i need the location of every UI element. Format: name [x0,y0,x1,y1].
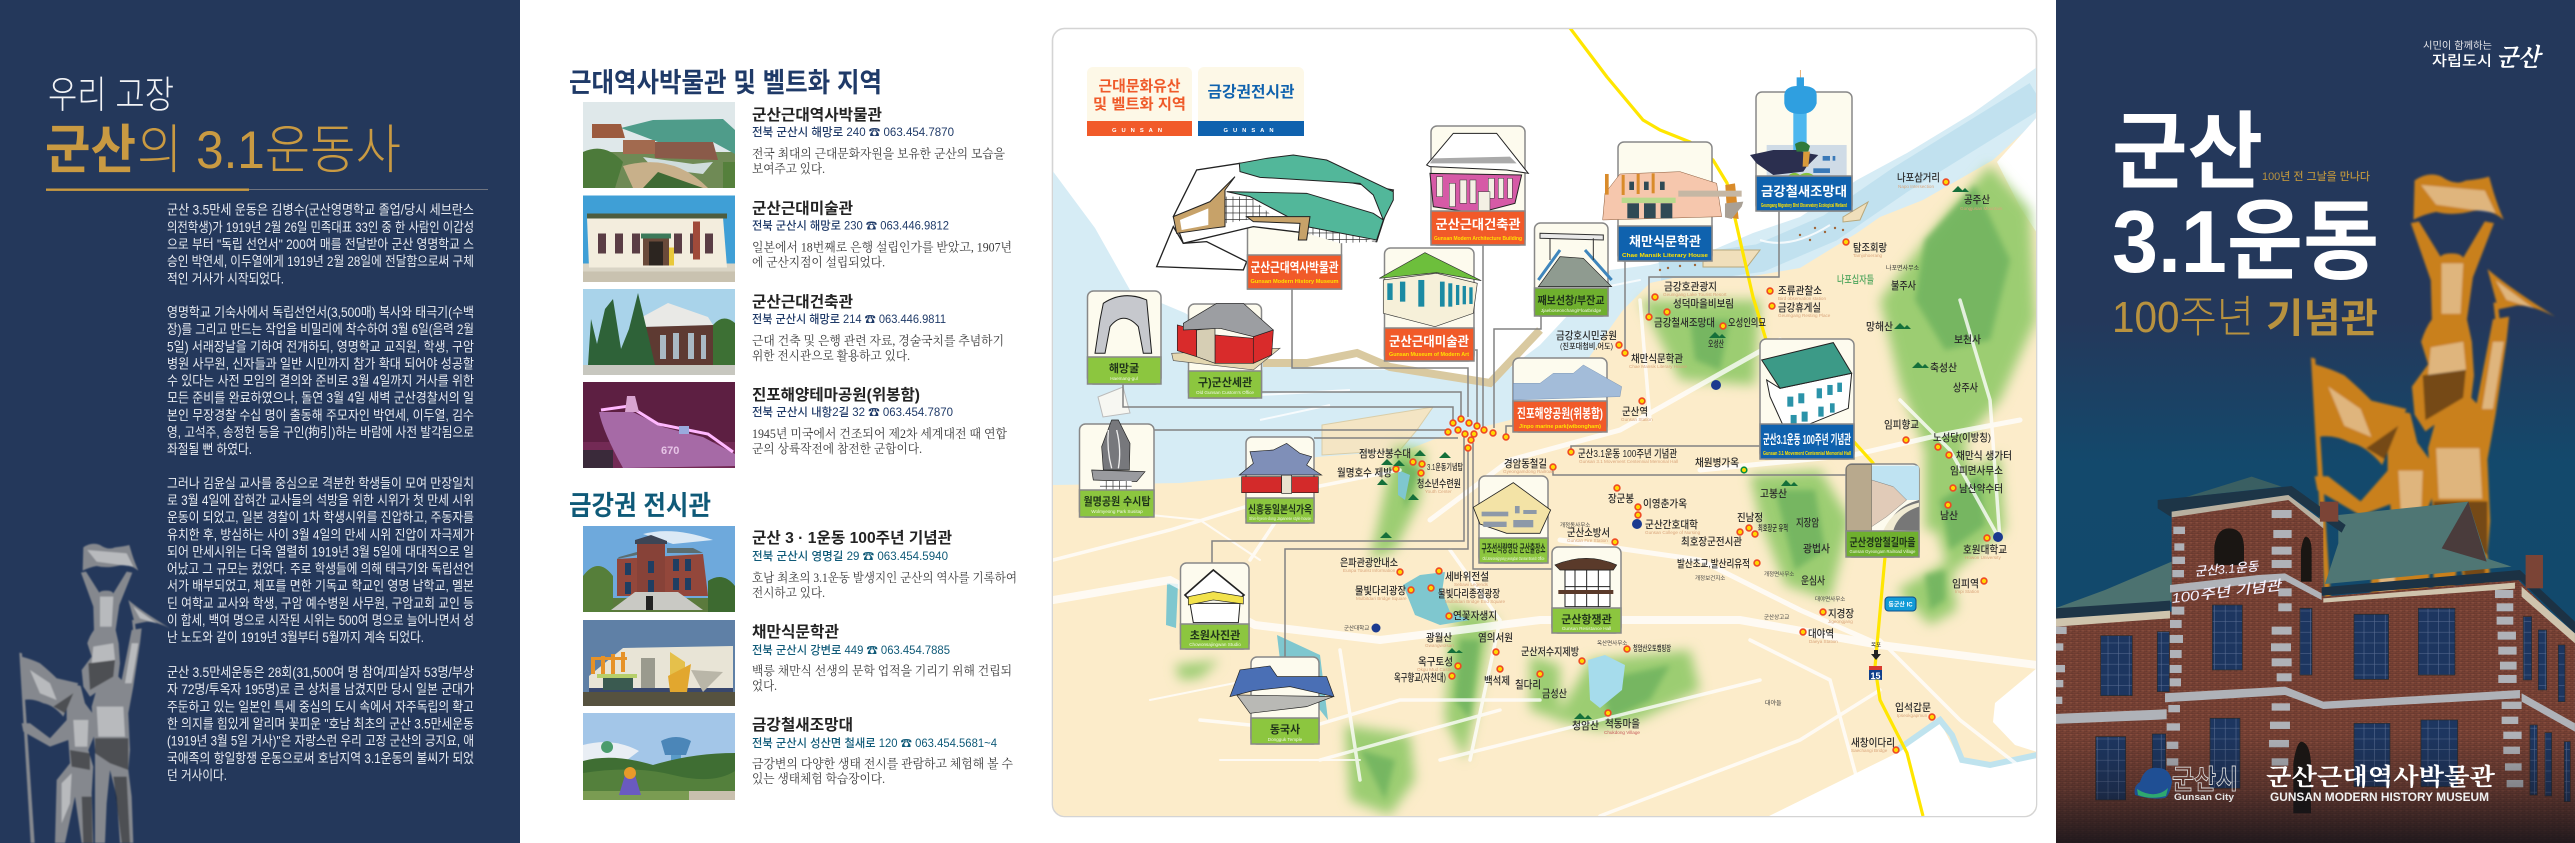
map labels: 상주사 [1953,381,1978,394]
legend: modern heritage [1087,67,1192,136]
map labels: 물빛다리광장 [1355,585,1406,597]
card: Sinheung-dong Japanese house: 신흥동일본식가옥 [1248,502,1312,516]
text: migratory bird observatory: 전북 군산시 성산면 철새로 120 ☎ 063.454.5681~4 [752,737,998,750]
sign: East Gunsan IC: 동군산 IC [1888,600,1913,608]
text: art museum: 일본에서 18번째로 은행 설립인가를 받았고, 1907년 [752,240,1012,254]
legend: modern heritage: 및 벨트화 지역 [1093,96,1186,113]
map labels: (진포대첩비,어도) [1560,341,1613,351]
card: Chowon photo studio: Chowonsajingwan Studio [1189,642,1241,647]
map labels: Bird observation station [1778,296,1826,301]
map labels: 진남정 [1737,512,1763,524]
map labels: Gunsan College of Nursing [1645,530,1701,535]
text block: paragraph 4: 군산 3.5만세운동은 28회(31,500여 명 참여/피살자 53명/부상 [167,665,474,680]
photo: history museum [583,102,735,188]
text: centennial memorial hall: 호남 최초의 3.1운동 발생지인 군산의 역사를 기록하여 [752,570,1017,585]
legend: modern heritage: 근대문화유산 [1098,78,1181,95]
map labels: 새창이다리 [1851,737,1895,749]
slogan: Gunsan self-reliant city [2424,40,2543,68]
subtitle: 100th anniversary memorial [2115,296,2377,336]
expressway 15 [1570,28,1923,816]
text block: paragraph 1: 승인 박연세, 이두열에게 1919년 2월 28일에 전달함으로써 구체 [167,254,474,269]
map labels: Napo Intersection [1898,184,1934,189]
card: Chae Mansik literary house [1603,142,1743,261]
text block: paragraph 1: 으로 부터 "독립 선언서" 200여 매를 전달받아 군산 영명학교 스 [167,237,474,252]
card: former food corporation: Old Joseonsigryang-yeongdan Gunsan Branch Office [1482,556,1545,561]
text: migratory bird observatory: 금강철새조망대 [752,716,853,734]
text block: paragraph 3: 유치한 후, 방심하는 사이 3월 4일의 만세 시위 진압이 자극제가 [167,527,474,542]
text: history museum: 전국 최대의 근대문화자원을 보유한 군산의 모습을 [752,146,1005,161]
map labels: 염의서원 [1478,631,1513,644]
legend: Geumgang exhibition: GUNSAN [1223,128,1279,134]
card: former food corporation [1473,476,1551,563]
card: Dongguk temple: Dongguk Temple [1268,737,1303,742]
card: bird observatory: 금강철새조망대 [1761,184,1847,199]
text: history museum [752,106,1005,176]
card: Chowon photo studio: 초원사진관 [1190,628,1240,642]
map labels: Youth Center [1425,489,1452,494]
text block: paragraph 2: 영명학교 기숙사에서 독립선언서(3,500매) 복사와 태극기(수백 [167,305,474,320]
map labels: 임피면사무소 [1950,465,2003,477]
text block: paragraph 4: 한 의지를 힘있게 알리며 꽃피운 "호남 최초의 군산 3.5만세운동 [167,716,474,732]
photo: centennial memorial hall [583,526,735,612]
map labels: Tamjohoerang [1853,253,1883,258]
text block: paragraph 4: 자 72명/투옥자 195명)로 큰 상처를 남겼지만 당시 일본 군대가 [167,682,474,697]
heading: Geumgang area exhibition halls: 금강권 전시관 [569,491,711,521]
map labels: Gunsan 3.1 Movement Centennial Memorial Hall [1579,459,1678,464]
map labels: Jigeongjang [1828,619,1853,624]
logo: Gunsan city [2135,765,2238,803]
map labels: Saechangi Bridge [1851,748,1888,753]
text block: paragraph 2: 영, 고석주, 송정헌 등을 구인(拘引)하는 바람에 사전 발각됨으로 [167,425,474,440]
map labels: 나포삼거리 [1897,171,1940,184]
map labels: 조류관찰소 [1778,285,1822,297]
map labels: 대야들 [1765,699,1782,707]
card: Sinheung-dong Japanese house: Shin-hyeon-dong Japanese style house [1249,516,1311,521]
map labels: Impi Station [1955,589,1980,594]
text block: paragraph 2: 장)를 그리고 만드는 작업을 비밀리에 착수하여 3월 6일(음력 2월 [167,322,474,337]
text block: paragraph 3: 딘 여학교 교사와 학생, 구암 예수병원 사무원, 구암교회 교인 등 [167,596,474,611]
map labels: 물빛다리종점광장 [1438,587,1500,600]
text: migratory bird observatory: 금강변의 다양한 생태 전시를 관람하고 체험해 볼 수 [752,756,1013,771]
map labels: 칠다리 [1515,678,1541,691]
card: Sinheung-dong Japanese house [1239,437,1322,523]
map labels: 옥구향교(자천대) [1394,671,1446,684]
card: Gyeongam railroad village: Gunsan Gyeongam Railroad Village [1850,549,1916,554]
text: architecture hall: 전북 군산시 해망로 214 ☎ 063.446.9811 [752,313,946,326]
map labels: 임피역 [1952,577,1979,590]
logo: Gunsan modern history museum: GUNSAN MODERN HISTORY MUSEUM [2270,792,2489,804]
map labels: 공주산 [1964,194,1990,206]
map labels: 옥구토성 [1418,656,1453,668]
map labels: Sebawi Legends [1454,582,1489,587]
heading: Gunsan 3.1 movement history: 군산 [45,121,136,180]
legend: Geumgang exhibition [1198,67,1304,136]
text: art museum: 군산근대미술관 [752,200,853,218]
title rule [46,188,488,191]
heading: our hometown: 우리 고장 [48,75,174,117]
text: Chae Mansik literary house: 었다. [752,678,777,693]
photo: Chae Mansik literary house [583,620,735,706]
text block: paragraph 1: 군산 3.5만세 운동은 김병수(군산영명학교 졸업/당시 세브란스 [167,203,474,218]
text: Chae Mansik literary house [752,623,1012,693]
map labels: 최호장군전시관 [1681,535,1742,548]
text block: paragraph 1: 적인 거사가 시작되었다. [167,271,284,286]
text block: paragraph 3 [167,476,474,645]
map markers: location dots [1393,179,1990,753]
text: architecture hall: 군산근대건축관 [752,293,853,311]
photo: Jinpo park warship: 670 [661,445,679,457]
text block: paragraph 3: 그러나 김윤실 교사를 중심으로 격분한 학생들이 모여 만장일치 [167,476,474,491]
card: old customs office: 구)군산세관 [1198,375,1252,389]
map labels: 옥산면사무소 [1597,639,1627,647]
map labels: 보천사 [1954,333,1981,346]
card: Chowon photo studio [1180,563,1249,649]
text: art museum: 에 군산지점이 설립되었다. [752,254,885,270]
text: history museum: 군산근대역사박물관 [752,106,882,124]
card: modern architecture hall: 군산근대건축관 [1436,217,1521,232]
text block: paragraph 4: 주둔하고 있는 일본인 특세 중심의 도시 속에서 자주독립의 확고 [167,699,474,714]
text block: paragraph 2: 수 있다는 사전 모임의 결의와 준비로 3월 4일까지 거사를 위한 [167,374,474,389]
map base: geography [1052,28,2037,817]
map labels: 나포면사무소 [1886,264,1920,272]
map labels: 금강휴게실 [1778,301,1821,314]
icon: highway 15 shield [1869,666,1882,681]
text block: paragraph 2: 좌절될 뻔 하였다. [167,442,252,457]
map labels: 청암산오토캠핑장 [1633,643,1671,653]
panel: illustrated map [1052,28,2037,817]
map labels: 척동마을 [1605,718,1640,730]
map labels: 연꽃자생지 [1453,609,1497,622]
text block: paragraph 2: 5일) 서래장날을 기하여 전개하되, 영명학교 교직원, 학생, 구암 [167,339,474,354]
text: migratory bird observatory: 있는 생태체험 학습장이다. [752,771,885,786]
map labels: 남산 [1940,510,1958,522]
map labels: 청소년수련원 [1417,477,1461,490]
card: Chae Mansik literary house: 채만식문학관 [1629,234,1701,249]
map labels: 은파관광안내소 [1340,557,1398,569]
card: centennial hall [1760,339,1854,459]
logo: Gunsan modern history museum: 군산근대역사박물관 [2266,764,2496,791]
card: Gyeongam railroad village [1846,464,1919,557]
text block: paragraph 2: 본인 무장경찰 수십 명이 출동해 주모자인 박연세, 이두열, 김수 [167,408,474,423]
map labels: Daeya Station [1809,639,1838,644]
sign: building neon text: 군산3.1운동 [2194,559,2261,579]
card: Haemang tunnel [1088,291,1161,384]
slogan: Gunsan self-reliant city: 군산 [2496,44,2543,72]
text: Jinpo park: 진포해양테마공원(위봉함) [752,386,920,404]
card: Dongguk temple [1230,657,1334,744]
map labels: 금강철새조망대 [1654,317,1715,329]
panel: local history text [0,0,520,843]
map labels: 장군봉 [1608,493,1634,505]
map labels: 노성당(이방칭) [1933,431,1991,444]
map labels: 불주사 [1891,280,1916,292]
map labels: 남산약수터 [1959,482,2003,495]
map labels: Mulbitdari Bridge End Square [1445,599,1505,604]
text: history museum: 전북 군산시 해망로 240 ☎ 063.454.7870 [752,126,954,139]
card: resistance hall [1552,547,1621,633]
map labels: 광법사 [1803,542,1830,555]
map labels: Gunsan Fire Station [1567,538,1608,543]
card: Jjaebo pier [1534,223,1612,316]
card: Chae Mansik literary house: Chae Mansik Literary House [1622,253,1708,259]
text block: paragraph 4 [167,665,474,783]
map labels: 대야역 [1808,627,1834,640]
card: Jinpo marine park: Jinpo marine park(wibongham) [1519,424,1601,430]
map labels: 채만식문학관 [1631,352,1683,365]
slogan: Gunsan self-reliant city: 자립도시 [2432,53,2492,70]
map labels: Mulbitdari Bridge Square [1356,596,1407,601]
map labels: 고봉산 [1760,488,1787,500]
sign: East Gunsan IC [1885,597,1916,611]
map icons: mountains [1377,186,1969,719]
map labels: 군산저수지제방 [1521,645,1579,658]
text: art museum [752,200,1012,270]
map labels: 세바위전설 [1445,570,1489,583]
photo: Jinpo park warship [583,382,735,468]
subtitle: 100th anniversary memorial: 100주년 [2112,293,2254,342]
map labels: Gwangwolsan [1425,643,1454,648]
text: Chae Mansik literary house: 채만식문학관 [752,623,839,641]
map labels: 3.1운동기념탑 [1427,462,1463,472]
icon: grey monument statue [19,544,170,843]
map labels: 군산상고교 [1764,613,1789,621]
card: resistance hall: Gunsan Resistance Hall [1562,626,1611,631]
map labels: Okgu Mud Castle [1417,667,1453,672]
text block: paragraph 3: 되어 만세시위는 더욱 열렬히 1919년 3월 5일에 대대적으로 일 [167,544,474,559]
bottom shadow [2056,735,2575,843]
text: architecture hall [752,293,1004,363]
icon: highway 15 shield: 15 [1870,671,1881,681]
map labels: 군산대학교 [1344,624,1369,632]
card: modern art museum: 군산근대미술관 [1389,334,1469,349]
logo: Gunsan modern history museum [2266,764,2496,804]
panel: museum listings [520,0,1052,843]
heading: modern history museum and belt area: 근대역사박물관 및 벨트화 지역 [569,68,882,98]
map labels: 최호장군 유적 [1758,523,1788,533]
card: old customs office [1172,303,1280,398]
map labels: 성덕마을비보림 [1673,297,1734,310]
card: centennial hall: 군산3.1운동 100주년 기념관 [1763,432,1851,447]
text block: paragraph 4: 던 거사이다. [167,768,227,783]
text: Jinpo park: 1945년 미국에서 건조되어 제2차 세계대전 때 연합 [752,426,1007,441]
map labels: 금강호관광지 [1664,281,1717,293]
map labels: 개정보건지소 [1695,574,1725,582]
text block: paragraph 3: 운동이 되었고, 일본 경찰이 1차 학생시위를 진압하고, 주동자를 [167,510,474,525]
map labels: 군산소방서 [1567,526,1610,539]
map labels: 대야면사무소 [1815,595,1845,603]
text: history museum: 보여주고 있다. [752,161,825,176]
text: Chae Mansik literary house: 전북 군산시 강변로 449 ☎ 063.454.7885 [752,644,950,657]
text block: paragraph 3: 이 합세, 백여 명으로 시작된 시위는 500여 명으로 늘어나면서 성 [167,613,474,628]
icon: gold monument statue [2310,173,2554,596]
card: Haemang tunnel: Haemang-gul [1110,376,1138,381]
map labels: 채원병가옥 [1695,456,1739,469]
text: architecture hall: 위한 전시관으로 활용하고 있다. [752,348,910,363]
title: March 1st movement: 3.1운동 [2112,192,2379,291]
card: Gunsan modern history museum: 군산근대역사박물관 [1250,260,1339,275]
map labels: Geumgang Resting Place [1778,313,1831,318]
card: Jinpo marine park: 진포해양공원(위봉함) [1517,406,1603,421]
legend: Geumgang exhibition: 금강권전시관 [1208,83,1294,101]
text block: paragraph 3: 로 3월 4일에 잡혀간 교사들의 석방을 위한 시위가 첫 만세 시위 [167,493,474,508]
text block: paragraph 4: (1919년 3월 5일 거사)"은 자랑스런 우리 고장 군산의 긍지요, 애 [167,734,474,749]
connector lines [1123,211,1846,657]
text block: paragraph 3: 어났고 그 규모는 컸었다. 주로 학생들에 의해 태극기와 독립선언 [167,562,474,577]
map labels: 채만식 생가터 [1956,450,2012,462]
map labels: 경암동철길 [1504,457,1547,470]
map labels: 금강호시민공원 [1556,329,1617,342]
card: old customs office: Old Gunsan Custom's Office [1196,390,1254,395]
map labels [1337,171,2012,753]
card: Wolmyeong park tower: Wolmyeong Park Susitap [1091,509,1143,514]
subtitle: 100th anniversary memorial: 기념관 [2266,297,2378,341]
logo: Gunsan city: 군산시 [2172,765,2238,795]
panel: cover [2055,0,2575,843]
text: centennial memorial hall [752,529,1017,600]
map labels: 군산간호대학 [1645,518,1698,531]
map labels: 개정동사무소 [1560,521,1590,529]
map labels: 백석제 [1484,674,1510,687]
map labels: 지장암 [1796,516,1819,529]
map labels: 이영춘가옥 [1643,497,1687,510]
map labels: Ipseokgapmun [1897,713,1928,718]
card: Gyeongam railroad village: 군산경암철길마을 [1850,535,1916,549]
card: Jjaebo pier: Jjaeboseonchang/Floatbridge [1541,308,1602,313]
map labels: 입석갑문 [1895,701,1931,714]
text block: paragraph 4: 국애족의 항일항쟁 운동으로써 호남지역 3.1운동의 불씨가 되었 [167,751,474,766]
green hills [1175,165,2036,815]
map labels: 군산3.1운동 100주년 기념관 [1578,448,1677,460]
arrow: to Mokpo: 목포 [1871,642,1881,649]
tagline: 100년 전 그날을 만나다 [2262,170,2370,183]
map labels: Howon University [1965,555,2001,560]
map labels: 월명호수 제방 [1337,466,1392,479]
map labels: 청암산 [1572,719,1599,732]
card: modern architecture hall [1427,126,1528,245]
text block: paragraph 1: 의전학생)가 1919년 2월 26일 민족대표 33인 중 한 사람인 이갑성 [167,220,474,235]
legend: modern heritage: GUNSAN [1112,128,1167,134]
card: modern art museum: Gunsan Museum of Modern Art [1389,352,1469,358]
bird flock dots [1659,227,1844,271]
heading: Gunsan 3.1 movement history: 의 3.1운동사 [137,121,401,180]
photo: migratory bird observatory [583,713,735,800]
map labels: 축성산 [1930,362,1957,374]
map labels: 임피향교 [1884,419,1919,431]
text block: paragraph 2 [167,305,474,457]
text block: paragraph 2: 병원 사무원, 신자들과 일반 시민까지 참가 확대 되어야 성공할 [167,356,474,371]
map labels: Chukdong Village [1604,730,1640,735]
card: former food corporation: 구조선식량영단 군산출장소 [1482,541,1546,555]
map labels: 군산역 [1622,405,1648,418]
card: Wolmyeong park tower [1080,420,1154,517]
map labels: Gongjusan Mountain [1960,206,2003,211]
map labels: Gunsan Station [1621,417,1653,422]
card: bird observatory [1750,70,1852,211]
card: Dongguk temple: 동국사 [1270,723,1300,736]
map labels: 나포십자들 [1837,274,1874,286]
text block: paragraph 3: 난 노도와 같이 1919년 3월부터 5월까지 계속 되었다. [167,630,424,645]
photo: architecture hall [583,289,735,375]
slogan: Gunsan self-reliant city: 시민이 함께하는 [2423,39,2492,52]
map labels: 발산초교,발산리유적 [1677,558,1750,570]
sign: building neon text [2172,560,2282,603]
map labels: 운심사 [1801,575,1825,587]
text block: paragraph 1 [167,203,474,286]
map labels: 망해산 [1866,320,1893,333]
map labels: Eunpa Tourist Information [1343,568,1396,573]
text block: paragraph 3: 서가 배부되었고, 체포를 면한 기독교 학교인 영명 남학교, 멜본 [167,579,474,594]
text: centennial memorial hall: 전시하고 있다. [752,585,825,600]
text: art museum: 전북 군산시 해망로 230 ☎ 063.446.9812 [752,220,949,232]
card: modern art museum [1379,248,1481,361]
card: Wolmyeong park tower: 월명공원 수시탑 [1084,494,1150,508]
map labels: 금성산 [1542,688,1567,700]
map labels: 점방산봉수대 [1359,447,1411,460]
text: migratory bird observatory [752,716,1013,786]
text: architecture hall: 근대 건축 및 은행 관련 자료, 경술국치를 추념하기 [752,333,1004,348]
map labels: Gyeongamdong Railroad [1503,469,1555,474]
map labels: 지경장 [1828,608,1854,620]
map labels: Chae Mansik Literary House [1629,364,1687,369]
white roads [1053,280,2037,816]
text: Jinpo park: 군의 상륙작전에 참전한 군함이다. [752,441,922,456]
photo: brick memorial building [2055,477,2575,843]
text: Chae Mansik literary house: 백릉 채만식 선생의 문학 업적을 기리기 위해 건립되 [752,663,1012,678]
card: modern architecture hall: Gunsan Modern Architecture Building [1434,236,1523,242]
sign: building neon text: 100주년 기념관 [2171,577,2283,606]
title: Gunsan: 군산 [2112,105,2263,199]
text: Jinpo park [752,386,1007,456]
arrow: to Mokpo [1871,642,1881,660]
card: Gunsan modern history museum: Gunsan Modern History Museum [1250,279,1339,285]
card: bird observatory: Geumgang Migratory Bird Observatory Ecological Wetland [1761,203,1847,209]
photo: art museum [583,196,735,282]
lakes [1166,470,1625,720]
text: Jinpo park: 전북 군산시 내항2길 32 ☎ 063.454.7870 [752,406,953,419]
map labels: 개정면사무소 [1764,570,1794,578]
card: Jinpo marine park [1513,358,1622,432]
darker hill cores [1360,185,2010,800]
card: Haemang tunnel: 해망굴 [1109,362,1139,375]
map labels: Geumgang Lake Tourist Resort [1663,292,1727,297]
text: centennial memorial hall: 전북 군산시 영명길 29 ☎ 063.454.5940 [752,550,948,563]
card: centennial hall: Gunsan 3.1 Movement Centennial Memorial Hall [1763,451,1851,457]
map labels: 탐조회랑 [1853,241,1887,254]
text block: paragraph 2: 모든 준비를 완료하였으나, 돌연 3월 4일 새벽 군산경찰서의 일 [167,391,474,406]
logo: Gunsan city: Gunsan City [2174,792,2235,803]
card: Jjaebo pier: 째보선창/부잔교 [1538,293,1604,307]
text: centennial memorial hall: 군산 3 · 1운동 100주년 기념관 [752,529,952,547]
card: resistance hall: 군산항쟁관 [1561,612,1612,626]
map labels: 호원대학교 [1963,543,2007,556]
map labels: 오성산 [1708,339,1724,349]
card: Gunsan modern history museum [1157,155,1393,289]
map labels: 광월산 [1426,632,1452,644]
map labels: 오성인의묘 [1728,317,1766,329]
